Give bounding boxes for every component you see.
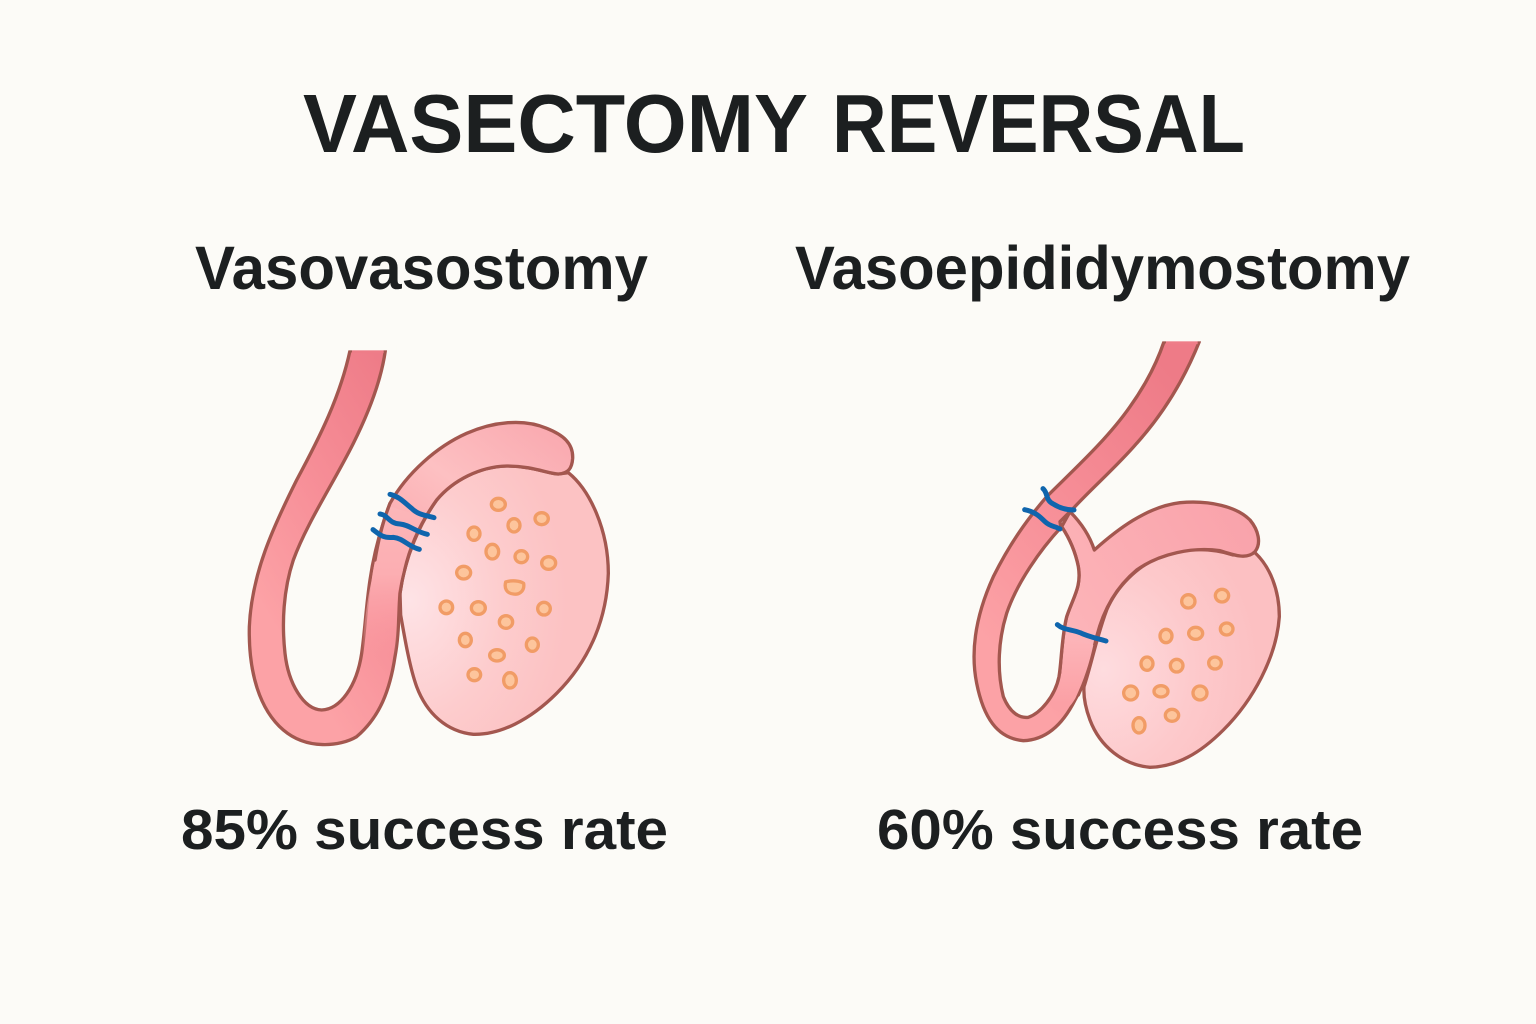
tube open end bbox=[1153, 335, 1210, 342]
title bbox=[303, 77, 1245, 170]
title: VASECTOMY bbox=[303, 77, 808, 170]
lower tube blend bbox=[1050, 638, 1093, 712]
tubule dots bbox=[1124, 589, 1233, 733]
stat: 60% success rate: 60% success rate bbox=[877, 798, 1363, 862]
epididymis branch bbox=[1059, 502, 1259, 695]
sutures bbox=[1025, 489, 1106, 641]
heading: Vasoepididymostomy: Vasoepididymostomy bbox=[795, 234, 1410, 302]
testis bbox=[400, 466, 608, 734]
tubule dots bbox=[440, 498, 556, 688]
vas deferens tube bbox=[249, 351, 427, 745]
stat: 85% success rate: 85% success rate bbox=[181, 798, 668, 862]
vas deferens and epididymis bbox=[974, 342, 1199, 741]
tube open end bbox=[340, 345, 397, 351]
illustration: vasoepididymostomy anatomy bbox=[974, 335, 1279, 767]
epididymis fill bbox=[375, 422, 573, 570]
testis bbox=[1084, 550, 1279, 767]
heading: Vasovasostomy: Vasovasostomy bbox=[195, 234, 648, 302]
epididymis outline bbox=[375, 422, 573, 570]
title: REVERSAL bbox=[832, 77, 1245, 170]
loop opening bbox=[999, 527, 1079, 717]
illustration: vasovasostomy anatomy bbox=[249, 345, 608, 745]
sutures bbox=[373, 494, 434, 549]
tube fill join bbox=[362, 507, 422, 657]
